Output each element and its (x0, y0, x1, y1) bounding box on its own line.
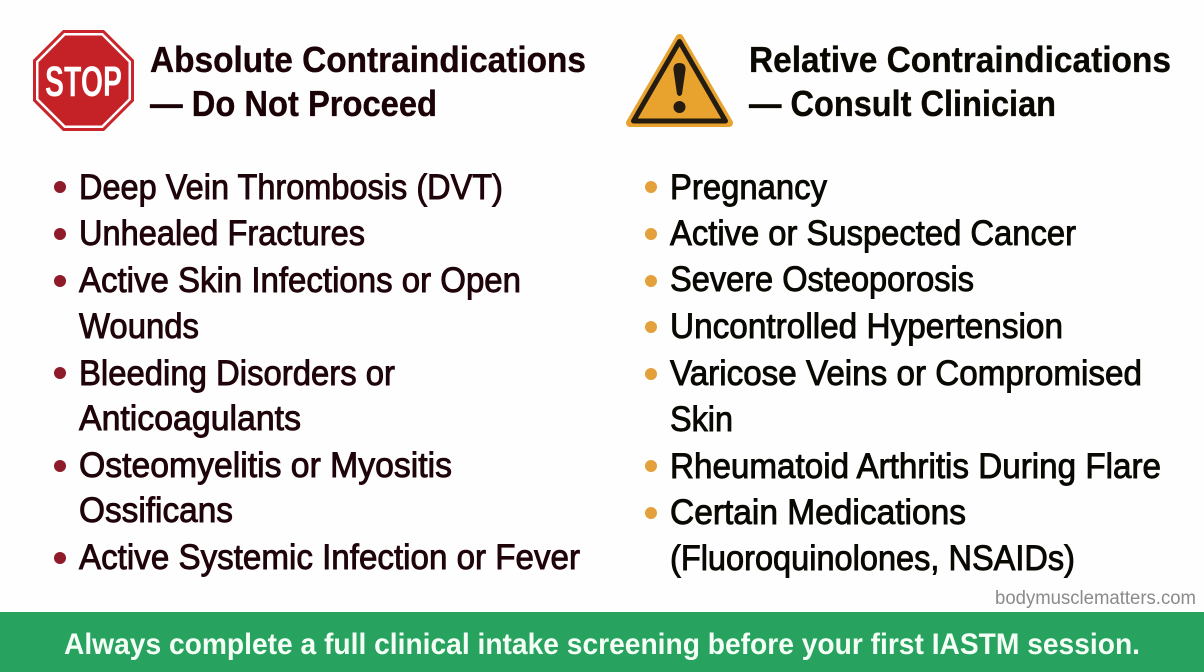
list: absolute contraindications: Active Systemic Infection or Fever (79, 538, 580, 577)
list: relative contraindications: Certain Medications (670, 493, 966, 532)
icon: warning triangle (630, 38, 729, 123)
list: relative contraindications: Varicose Veins or Compromised (670, 354, 1142, 393)
heading: relative contraindications: Relative Contraindications (749, 39, 1171, 80)
list: absolute contraindications: Unhealed Fractures (79, 214, 365, 253)
list: relative contraindications (645, 168, 1161, 578)
footer banner: Always complete a full clinical intake screening before your first IASTM session. (64, 628, 1140, 661)
list: relative contraindications: Active or Suspected Cancer (670, 214, 1076, 253)
list: absolute contraindications: Anticoagulants (79, 399, 301, 438)
list: absolute contraindications: Osteomyelitis or Myositis (79, 446, 452, 485)
list: absolute contraindications: Ossificans (79, 491, 233, 530)
heading: absolute contraindications (150, 39, 586, 124)
list: absolute contraindications: Deep Vein Thrombosis (DVT) (79, 168, 503, 207)
heading: relative contraindications (749, 39, 1171, 124)
panel: relative contraindications (630, 38, 1171, 578)
heading: relative contraindications: — Consult Clinician (749, 83, 1056, 124)
list: relative contraindications: Uncontrolled Hypertension (670, 307, 1063, 346)
heading: absolute contraindications: Absolute Contraindications (150, 39, 586, 80)
heading: absolute contraindications: — Do Not Proceed (150, 83, 437, 124)
list: absolute contraindications: Active Skin Infections or Open (79, 261, 521, 300)
list: relative contraindications: (Fluoroquinolones, NSAIDs) (670, 539, 1075, 578)
list: relative contraindications: Rheumatoid Arthritis During Flare (670, 447, 1161, 486)
list: relative contraindications: Pregnancy (670, 168, 827, 207)
list: relative contraindications: Severe Osteoporosis (670, 260, 974, 299)
list: relative contraindications: Skin (670, 400, 733, 439)
list: absolute contraindications (54, 168, 580, 577)
panel: absolute contraindications (33, 30, 586, 577)
footer banner (0, 612, 1204, 672)
watermark: bodymusclematters.com (995, 588, 1196, 609)
list: absolute contraindications: Bleeding Disorders or (79, 354, 395, 393)
icon: stop sign: STOP (45, 58, 122, 106)
icon: stop sign (33, 30, 134, 131)
list: absolute contraindications: Wounds (79, 307, 199, 346)
